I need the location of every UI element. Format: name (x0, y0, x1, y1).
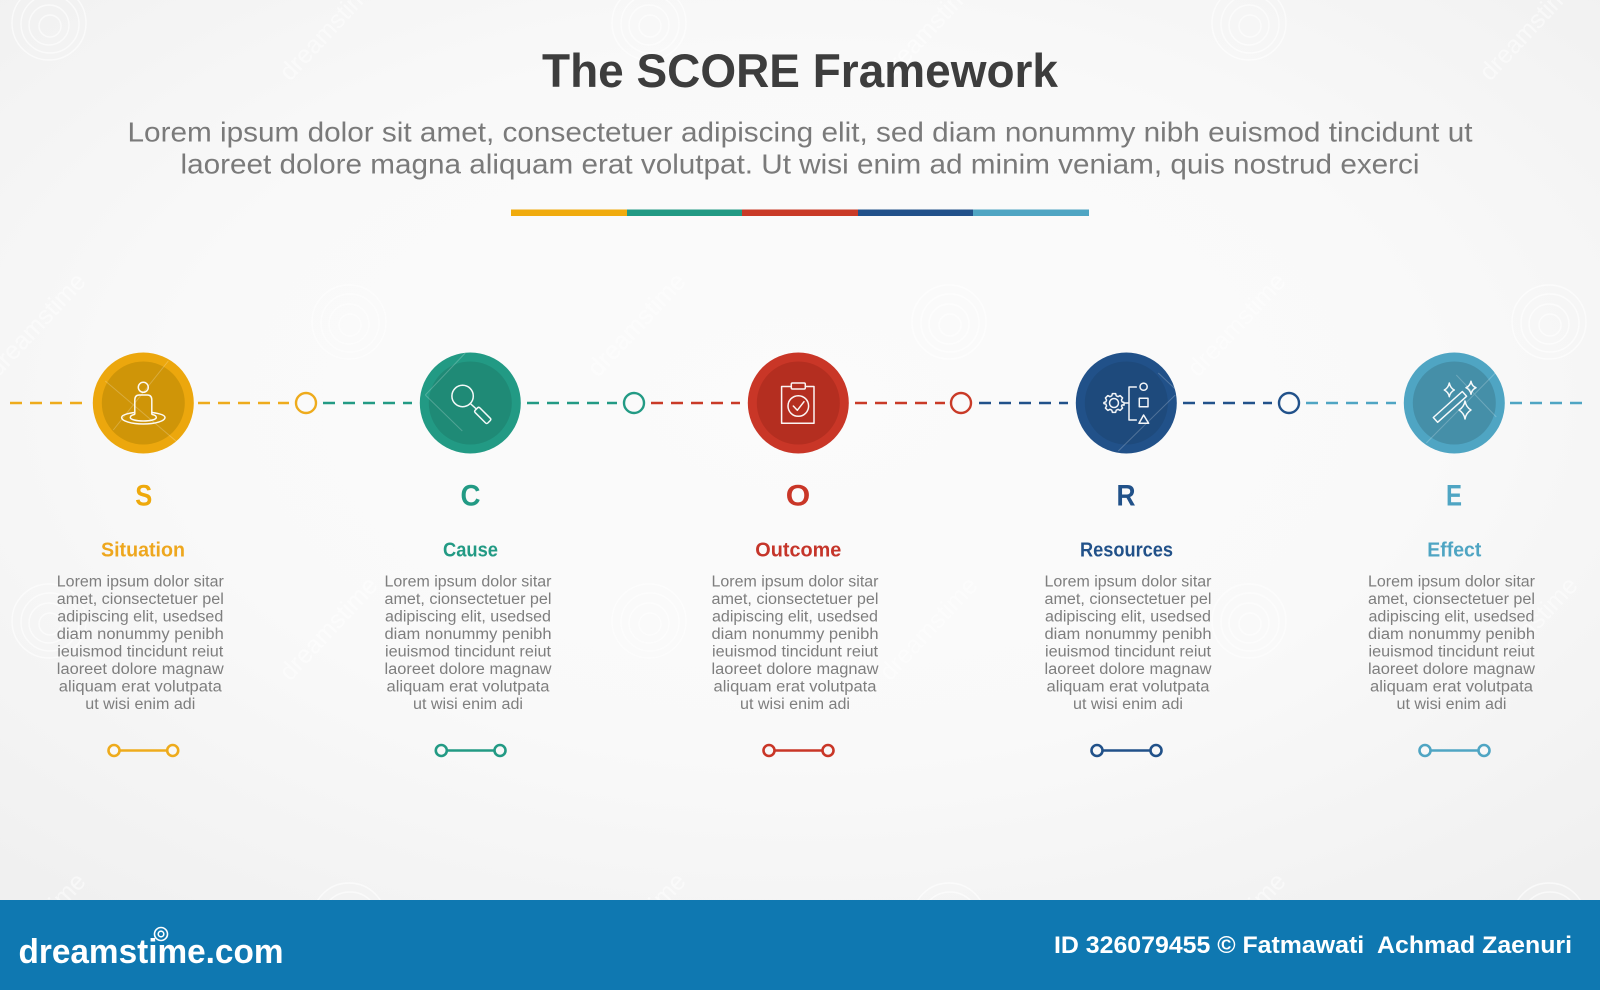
text block: Situation: aliquam erat volutpata (59, 678, 222, 695)
icon: magnifying glass (420, 352, 521, 454)
text block: Outcome: diam nonummy penibh (712, 626, 878, 643)
timeline dashed line (10, 402, 1583, 404)
connector (1420, 745, 1490, 756)
text block: Cause: diam nonummy penibh (384, 626, 552, 643)
watermark pattern: dreamstime (1182, 267, 1291, 382)
footer credit: ID 326079455 © Fatmawati Achmad Zaenuri (1054, 932, 1572, 959)
text block: Situation (57, 574, 225, 713)
text block: Resources: adipiscing elit, usedsed (1045, 609, 1211, 626)
text block: Situation: diam nonummy penibh (57, 626, 224, 643)
text block: Situation: laoreet dolore magnaw (57, 661, 225, 678)
watermark pattern: dreamstime (1474, 571, 1583, 686)
icon: magic wand (1404, 352, 1505, 454)
letter C: C (460, 480, 480, 513)
connector (108, 745, 178, 756)
text block: Effect: amet, cionsectetuer pel (1368, 591, 1535, 608)
icon: gear with shapes (1076, 352, 1177, 454)
text block: Effect: aliquam erat volutpata (1370, 678, 1533, 695)
subtitle: Lorem ipsum dolor sit amet, consectetuer adipiscing elit, sed diam nonummy nibh euismod tincidunt ut (128, 117, 1473, 148)
text block: Cause: ut wisi enim adi (413, 696, 523, 713)
text block: Outcome: adipiscing elit, usedsed (712, 609, 878, 626)
watermark pattern: dreamstime (582, 267, 691, 382)
text block: Cause: laoreet dolore magnaw (384, 661, 552, 678)
timeline junction nodes (296, 393, 1299, 413)
panel: O Outcome (712, 352, 879, 756)
panel: C Cause (384, 352, 552, 756)
text block: Effect: laoreet dolore magnaw (1368, 661, 1536, 678)
icon: person in ripples (93, 352, 194, 454)
text block: Outcome: aliquam erat volutpata (714, 678, 877, 695)
text block: Outcome: ieuismod tincidunt reiut (712, 644, 879, 660)
panel: S Situation (57, 352, 225, 756)
footer bar (0, 900, 1600, 990)
watermark pattern: dreamstime (582, 867, 691, 982)
colour bar (511, 210, 1089, 216)
watermark pattern: dreamstime (1182, 867, 1291, 982)
panel: E Effect (1368, 352, 1536, 756)
heading: Cause: Cause (443, 540, 498, 562)
text block: Effect: Lorem ipsum dolor sitar (1368, 574, 1535, 591)
text block: Outcome: laoreet dolore magnaw (712, 661, 879, 678)
text block: Effect (1368, 574, 1536, 713)
watermark pattern: dreamstime (874, 571, 983, 686)
text block: Cause: aliquam erat volutpata (386, 678, 550, 695)
text block: Outcome: Lorem ipsum dolor sitar (712, 574, 878, 591)
heading: Situation: Situation (101, 540, 185, 562)
heading: Resources: Resources (1080, 540, 1173, 562)
text block: Situation: ieuismod tincidunt reiut (57, 644, 224, 660)
text block: Outcome (712, 574, 879, 713)
text block: Cause: amet, cionsectetuer pel (384, 591, 552, 608)
text block: Resources: diam nonummy penibh (1044, 626, 1212, 643)
text block: Cause: adipiscing elit, usedsed (385, 609, 551, 626)
title: The SCORE Framework (542, 44, 1059, 97)
text block: Resources: laoreet dolore magnaw (1044, 661, 1212, 678)
footer logo: dreamstime.com (18, 933, 284, 971)
subtitle: laoreet dolore magna aliquam erat volutpat. Ut wisi enim ad minim veniam, quis nostrud exerci (180, 149, 1420, 180)
text block: Resources (1044, 574, 1212, 713)
heading: Effect: Effect (1427, 540, 1482, 562)
text block: Outcome: amet, cionsectetuer pel (712, 591, 878, 608)
text block: Effect: adipiscing elit, usedsed (1368, 609, 1534, 626)
text block: Effect: diam nonummy penibh (1368, 626, 1535, 643)
subtitle (128, 117, 1473, 180)
text block: Outcome: ut wisi enim adi (740, 696, 850, 713)
connector (1092, 745, 1162, 756)
text block: Cause: Lorem ipsum dolor sitar (384, 574, 552, 591)
text block: Cause: ieuismod tincidunt reiut (385, 644, 552, 660)
connector (436, 745, 506, 756)
letter S: S (135, 480, 152, 513)
heading: Outcome: Outcome (755, 540, 841, 562)
text block: Cause (384, 574, 552, 713)
letter R: R (1116, 480, 1136, 513)
text block: Situation: adipiscing elit, usedsed (57, 609, 223, 626)
text block: Situation: amet, cionsectetuer pel (57, 591, 224, 608)
connector (764, 745, 834, 756)
text block: Resources: ieuismod tincidunt reiut (1045, 644, 1212, 660)
text block: Effect: ieuismod tincidunt reiut (1368, 644, 1535, 660)
letter E: E (1446, 480, 1462, 513)
text block: Situation: ut wisi enim adi (85, 696, 195, 713)
text block: Effect: ut wisi enim adi (1396, 696, 1506, 713)
text block: Resources: ut wisi enim adi (1073, 696, 1183, 713)
panel: R Resources (1044, 352, 1212, 756)
watermark pattern: dreamstime (274, 571, 383, 686)
text block: Resources: Lorem ipsum dolor sitar (1044, 574, 1212, 591)
text block: Situation: Lorem ipsum dolor sitar (57, 574, 224, 591)
text block: Resources: amet, cionsectetuer pel (1044, 591, 1212, 608)
text block: Resources: aliquam erat volutpata (1046, 678, 1210, 695)
icon: clipboard check (748, 352, 849, 454)
letter O: O (786, 480, 810, 513)
